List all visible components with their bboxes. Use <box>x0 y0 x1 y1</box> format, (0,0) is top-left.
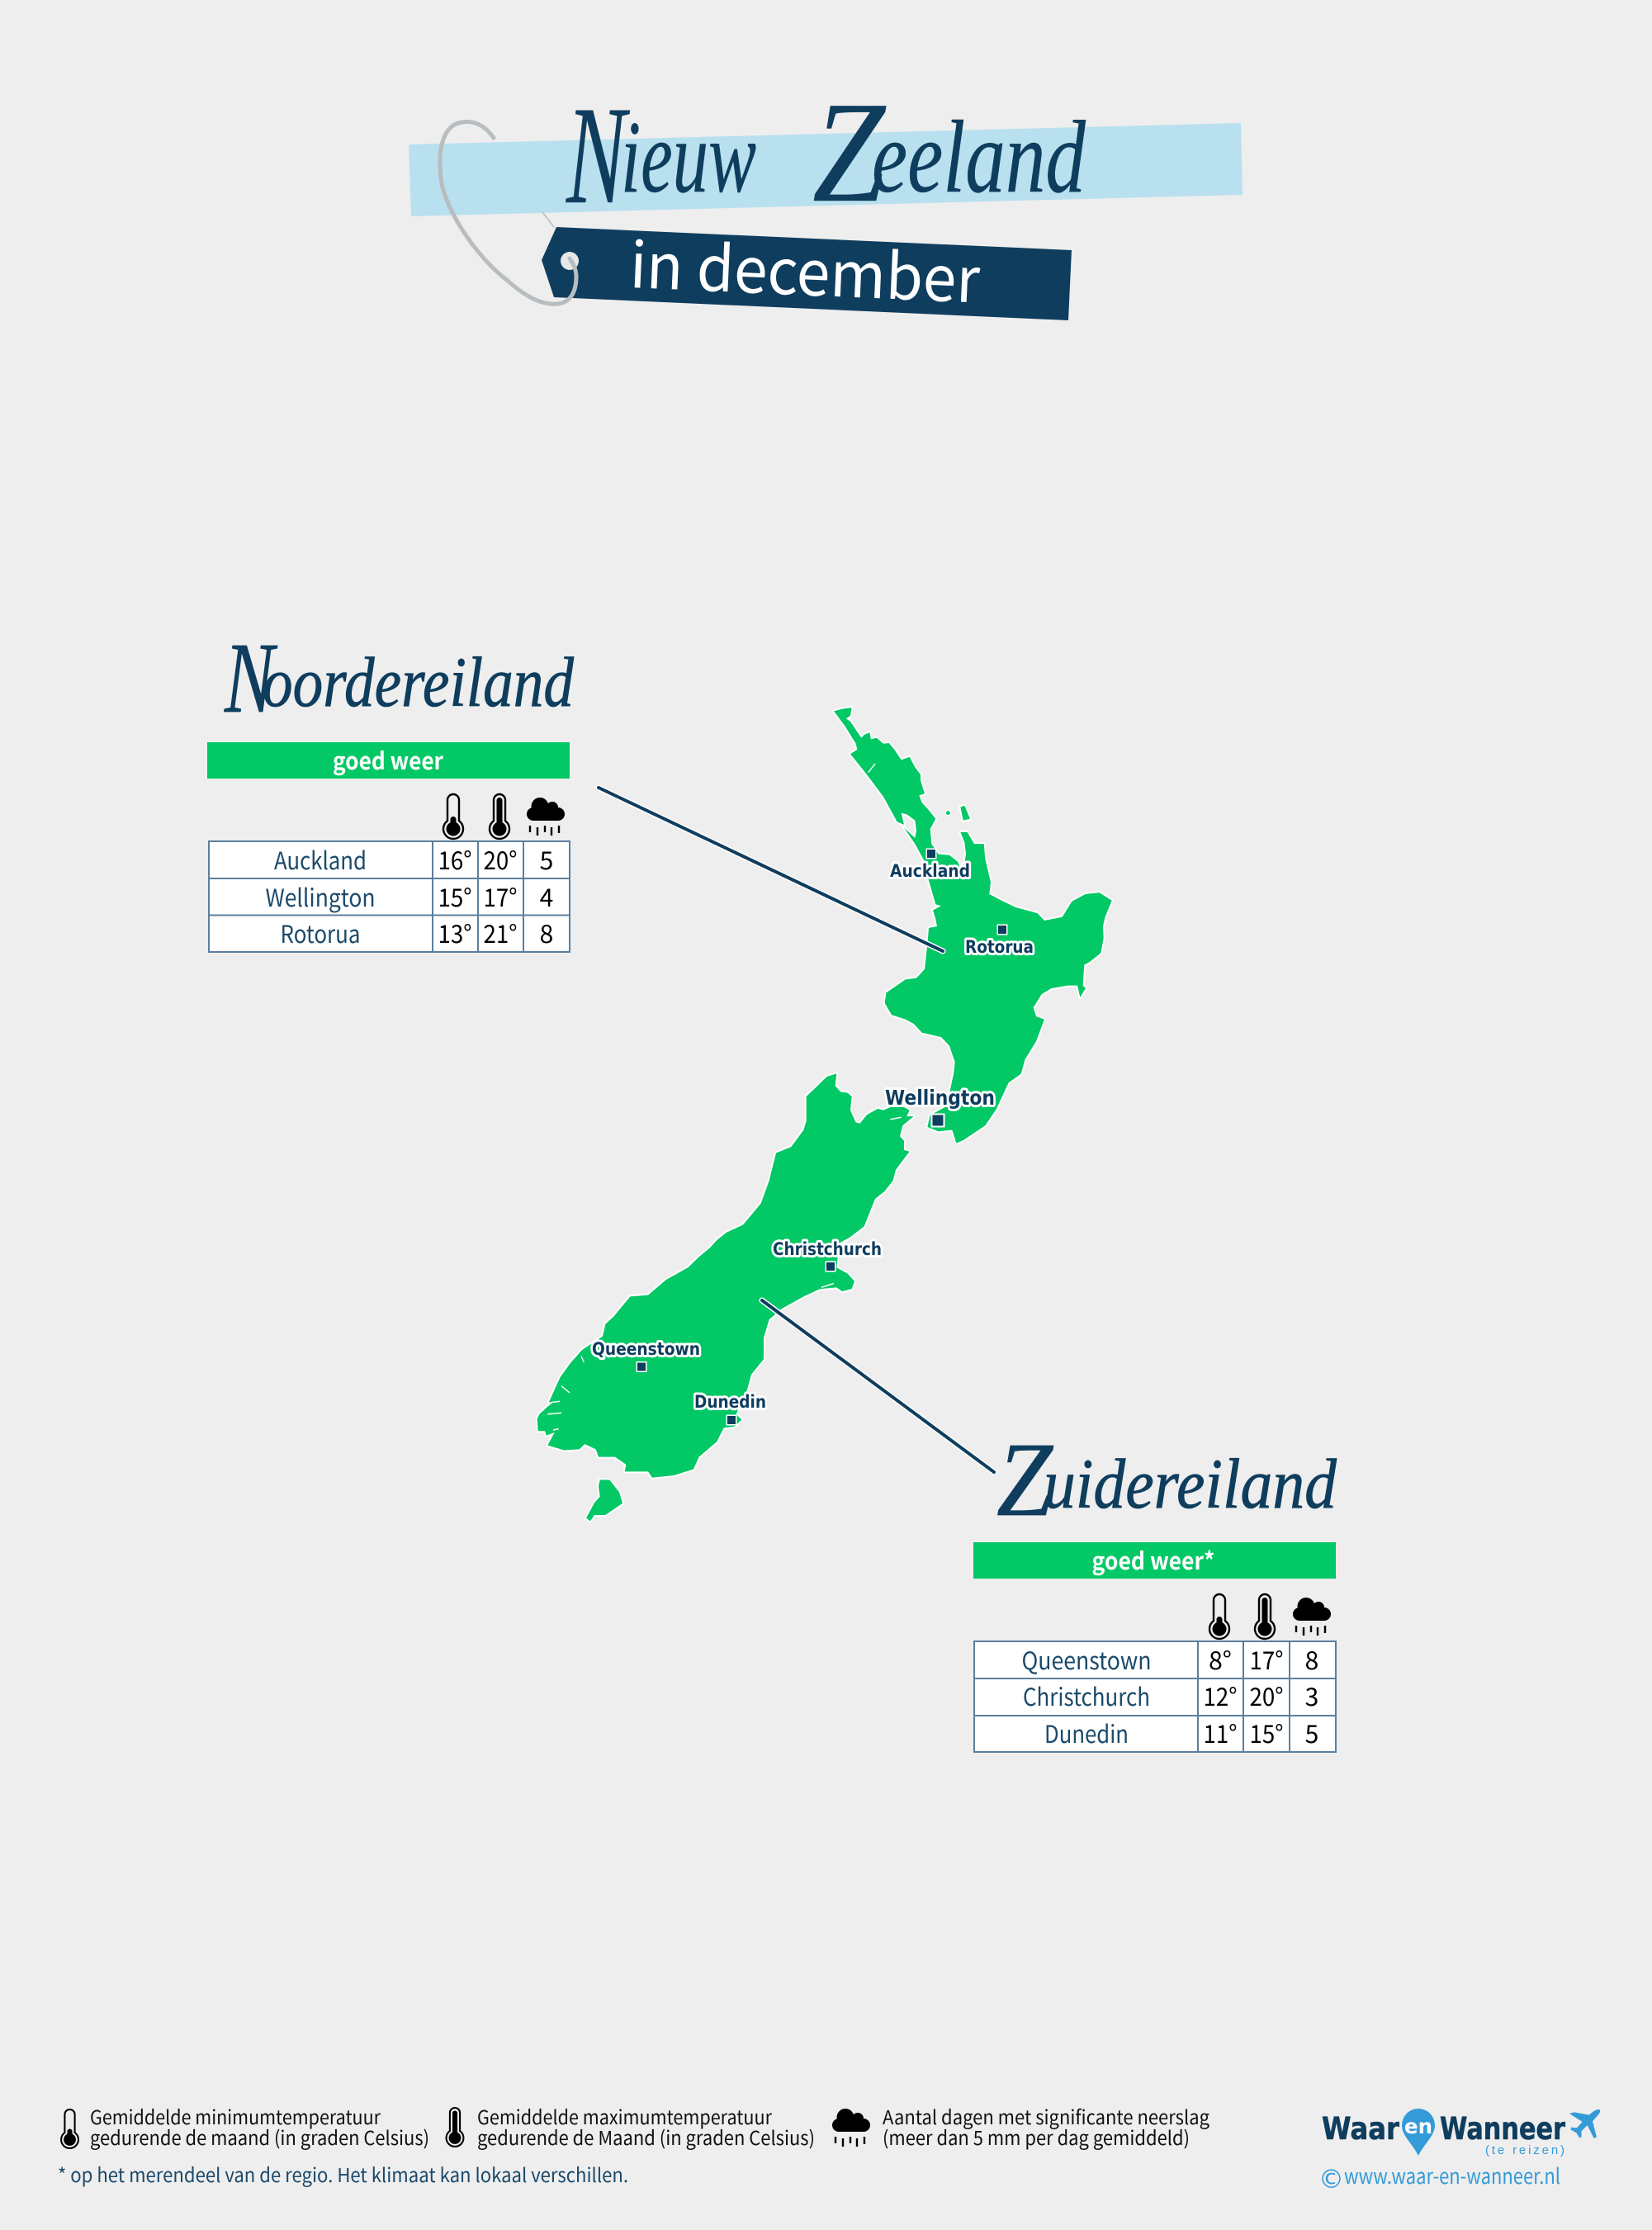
title: Nieuw Zeeland: eeland <box>872 101 1086 215</box>
row: Dunedin: 11° <box>1204 1714 1237 1750</box>
city: Wellington <box>885 1086 995 1126</box>
title: Nieuw Zeeland: Z <box>812 72 887 232</box>
row: Wellington <box>266 878 553 914</box>
legend: maximum temperature: Gemiddelde maximumtemperatuur <box>477 2102 773 2130</box>
row: Christchurch: 3 <box>1305 1677 1318 1713</box>
row: Auckland: 16° <box>438 840 472 877</box>
city: Dunedin <box>694 1392 766 1424</box>
title: Nieuw Zeeland: ieuw <box>621 101 756 215</box>
row: Rotorua: 13° <box>438 914 472 950</box>
icon: map pin: en <box>1404 2114 1432 2138</box>
city: Rotorua: Rotorua <box>965 937 1034 957</box>
logo wordmark left: Waar <box>1322 2111 1400 2147</box>
leader line: Zuidereiland <box>762 1300 994 1472</box>
rating bar: goed weer* <box>973 1542 1336 1579</box>
row: Dunedin: Dunedin <box>1044 1716 1129 1750</box>
city: Queenstown: Queenstown <box>592 1339 700 1359</box>
Stewart Island <box>586 1480 622 1521</box>
heading: Zuidereiland: Z <box>996 1421 1054 1538</box>
footnote: * op het merendeel van de regio. Het klimaat kan lokaal verschillen. <box>58 2160 628 2188</box>
row: Christchurch: 20° <box>1250 1677 1283 1713</box>
icon: airplane <box>1569 2109 1600 2138</box>
title: Nieuw Zeeland: N <box>566 78 630 233</box>
rating bar: goed weer <box>207 742 570 779</box>
table: Zuidereiland <box>974 1641 1336 1752</box>
row: Wellington: 17° <box>484 878 517 914</box>
row: Rotorua: Rotorua <box>281 916 360 950</box>
legend: minimum temperature <box>61 2102 429 2151</box>
legend: rain days: Aantal dagen met significante neerslag <box>883 2102 1209 2130</box>
table: Noordereiland <box>209 840 570 952</box>
legend: rain days <box>832 2102 1209 2151</box>
North Island <box>834 708 1112 1143</box>
row: Christchurch <box>1023 1677 1318 1713</box>
row: Rotorua: 21° <box>484 914 517 950</box>
row: Auckland: 20° <box>484 840 517 877</box>
title: Nieuw Zeeland <box>566 72 1086 233</box>
city: Queenstown <box>592 1339 700 1371</box>
icon: maximum temperature <box>490 794 509 839</box>
legend: maximum temperature: gedurende de Maand (in graden Celsius) <box>477 2123 815 2151</box>
legend <box>58 2102 1209 2188</box>
row: Queenstown: 8 <box>1305 1641 1318 1677</box>
icon: rain cloud <box>1293 1598 1331 1636</box>
row: Wellington: 15° <box>438 878 472 914</box>
row: Rotorua <box>281 914 553 950</box>
legend: maximum temperature <box>447 2102 815 2151</box>
title block <box>409 72 1243 320</box>
website: www.waar-en-wanneer.nl <box>1344 2160 1560 2190</box>
row: Auckland: 5 <box>540 840 553 877</box>
icon: rain cloud <box>527 798 565 836</box>
icon: maximum temperature <box>1255 1594 1275 1639</box>
title band <box>409 123 1243 216</box>
city: Christchurch: Christchurch <box>773 1239 882 1259</box>
rating bar: goed weer: goed weer <box>333 742 443 777</box>
legend: minimum temperature: Gemiddelde minimumtemperatuur <box>90 2102 381 2130</box>
city: Dunedin: Dunedin <box>694 1392 766 1412</box>
South Island <box>537 1073 914 1521</box>
icon: map pin <box>1402 2109 1435 2156</box>
logo tagline: (te reizen) <box>1485 2143 1564 2157</box>
row: Auckland <box>274 840 553 877</box>
row: Christchurch: Christchurch <box>1023 1678 1150 1713</box>
row: Christchurch: 12° <box>1204 1677 1237 1713</box>
legend: minimum temperature: gedurende de maand (in graden Celsius) <box>90 2123 429 2151</box>
heading: Zuidereiland: uidereiland <box>1044 1444 1337 1523</box>
row: Dunedin <box>1044 1714 1318 1750</box>
city: Rotorua <box>965 926 1034 957</box>
city: Wellington: Wellington <box>885 1086 995 1110</box>
heading: Noordereiland: N <box>224 623 278 734</box>
tag hole <box>561 252 579 270</box>
icon: minimum temperature <box>443 794 463 839</box>
row: Auckland: Auckland <box>274 842 367 877</box>
panel: Noordereiland <box>207 623 575 952</box>
row: Queenstown <box>1022 1641 1318 1677</box>
website: © <box>1318 2165 1344 2194</box>
legend: rain days: (meer dan 5 mm per dag gemiddeld) <box>883 2123 1190 2151</box>
row: Dunedin: 5 <box>1305 1714 1318 1750</box>
tag string <box>440 122 576 304</box>
row: Queenstown: 17° <box>1250 1641 1283 1677</box>
panel: Zuidereiland <box>973 1421 1337 1752</box>
row: Queenstown: 8° <box>1209 1641 1232 1677</box>
city: Auckland <box>890 850 970 881</box>
row: Rotorua: 8 <box>540 914 553 950</box>
row: Wellington: 4 <box>540 878 553 914</box>
icon: minimum temperature <box>1209 1594 1229 1639</box>
logo: Waar en Wanneer <box>1318 2109 1600 2194</box>
rating bar: goed weer*: goed weer* <box>1091 1542 1215 1577</box>
city: Auckland: Auckland <box>890 861 970 881</box>
luggage tag <box>542 227 1072 320</box>
subtitle: in december: in december <box>628 215 982 320</box>
logo wordmark right: Wanneer <box>1440 2111 1566 2147</box>
city: Christchurch <box>773 1239 882 1271</box>
row: Wellington: Wellington <box>266 879 375 914</box>
website <box>1318 2160 1560 2194</box>
row: Dunedin: 15° <box>1250 1714 1283 1750</box>
row: Queenstown: Queenstown <box>1022 1642 1151 1677</box>
leader line: Noordereiland <box>599 788 943 951</box>
heading: Noordereiland: oordereiland <box>263 642 575 722</box>
map of New Zealand <box>537 708 1112 1521</box>
